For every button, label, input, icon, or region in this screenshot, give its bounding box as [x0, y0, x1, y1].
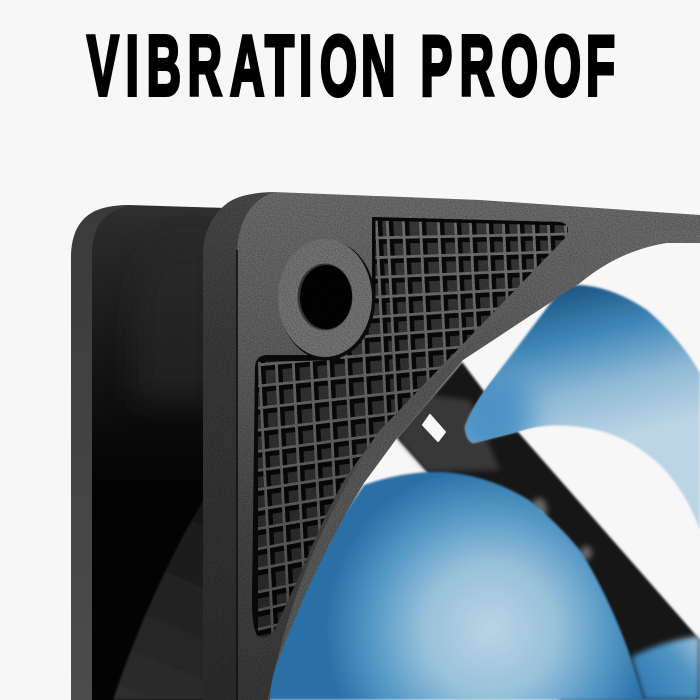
fan: rear frame: [71, 205, 225, 700]
fan: large blue blade: [260, 472, 644, 700]
surface grain: [200, 190, 700, 700]
icon: screw washer and hole: [278, 239, 375, 360]
mesh pad: anti-vibration grid: [252, 217, 568, 638]
front frame face: [237, 192, 700, 700]
front frame inner flank: [240, 220, 700, 700]
title: PROOF: [421, 19, 615, 114]
title: VIBRATION: [87, 19, 395, 114]
front frame side wall: [203, 192, 273, 700]
fan: black strut behind blades: [397, 362, 700, 700]
fan: front frame: [203, 192, 700, 700]
icon: slot in strut: [423, 415, 445, 441]
face edge line: [236, 250, 238, 700]
fan: lower right blue blade: [631, 636, 700, 700]
title: [87, 19, 615, 114]
fan: upper blue blade: [448, 285, 700, 530]
